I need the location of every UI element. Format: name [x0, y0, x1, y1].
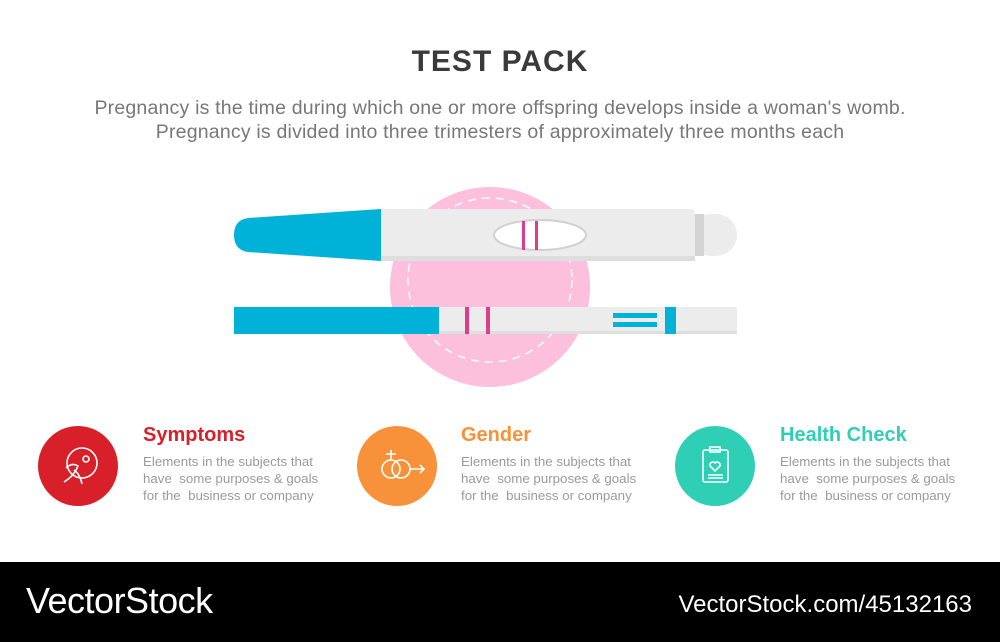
title: TEST PACK	[412, 45, 588, 78]
heading: Symptoms	[143, 424, 245, 446]
text	[461, 454, 636, 503]
panel: symptoms	[38, 424, 318, 506]
text	[780, 454, 955, 503]
heading: Health Check	[780, 424, 907, 446]
footer bar	[0, 562, 1000, 642]
text: Elements in the subjects that	[461, 454, 631, 469]
subtitle: Pregnancy is divided into three trimesters of approximately three months each	[156, 121, 844, 143]
illustration: test pack	[234, 187, 737, 387]
text: have some purposes & goals	[780, 471, 955, 486]
text: Elements in the subjects that	[143, 454, 313, 469]
icon: symptoms	[38, 426, 118, 506]
subtitle: Pregnancy is the time during which one or more offspring develops inside a woman's womb.	[94, 97, 906, 119]
strip test	[234, 307, 737, 334]
heading: Gender	[461, 424, 531, 446]
footer url: VectorStock.com/45132163	[678, 591, 972, 618]
text: for the business or company	[461, 488, 632, 503]
icon: clipboard	[675, 426, 755, 506]
panel: gender	[357, 424, 636, 506]
subtitle	[94, 97, 906, 143]
text: for the business or company	[143, 488, 314, 503]
text: have some purposes & goals	[461, 471, 636, 486]
text	[143, 454, 318, 503]
panel: health check	[675, 424, 955, 506]
pen test	[234, 209, 737, 261]
icon: gender	[357, 426, 437, 506]
pink circle	[390, 187, 590, 387]
footer logo: VectorStock	[26, 580, 213, 621]
text: Elements in the subjects that	[780, 454, 950, 469]
text: have some purposes & goals	[143, 471, 318, 486]
text: for the business or company	[780, 488, 951, 503]
